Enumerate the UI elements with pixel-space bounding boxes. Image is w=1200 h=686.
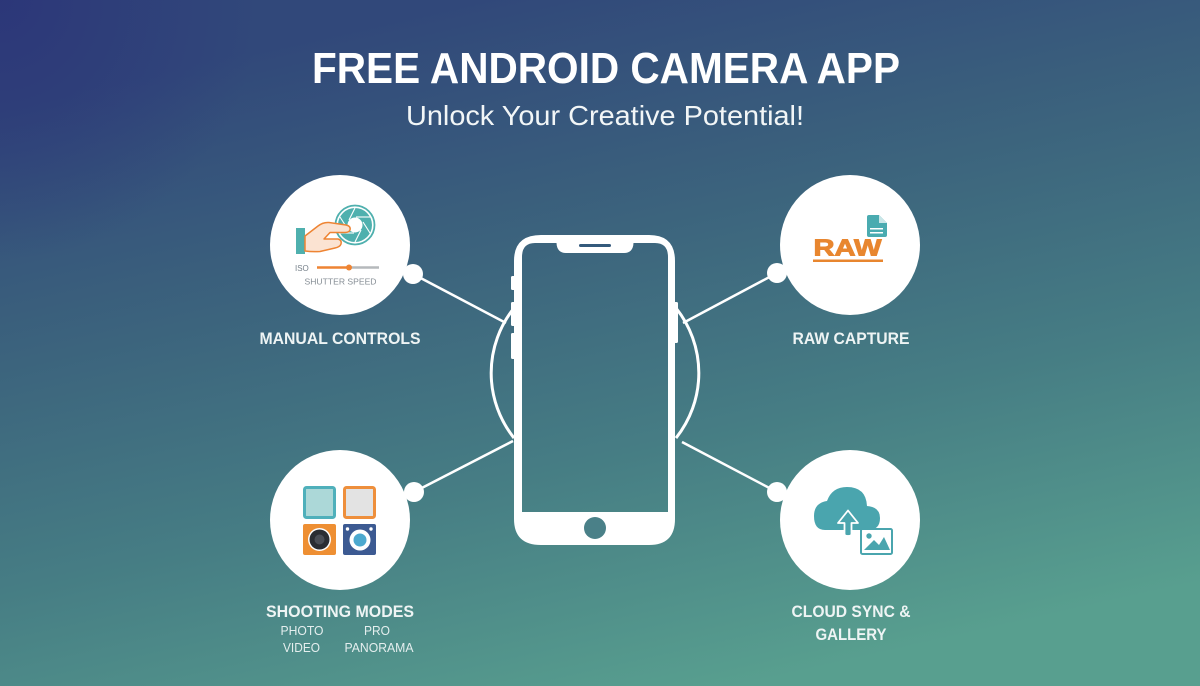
connector: raw capture: [683, 273, 777, 323]
speaker: [579, 244, 611, 247]
label: shutter speed: SHUTTER SPEED: [304, 276, 376, 286]
slider: [295, 264, 379, 273]
home button: [584, 517, 606, 539]
arc: left of phone: [491, 308, 514, 438]
mode list: PANORAMA: [344, 640, 414, 655]
panel: shooting modes: [270, 450, 424, 590]
panel: raw capture: [767, 175, 920, 315]
icon: aperture: [336, 206, 374, 244]
icon: upload arrow: [838, 510, 858, 536]
heading: shooting modes: SHOOTING MODES: [266, 602, 414, 621]
phone body: [514, 235, 675, 545]
mode list: VIDEO: [283, 640, 320, 655]
connector: manual controls: [413, 274, 506, 323]
heading: raw capture: RAW CAPTURE: [792, 329, 910, 348]
slider: ISO: [295, 264, 309, 273]
arc: right of phone: [676, 308, 699, 438]
panel: cloud sync and gallery: [767, 450, 920, 590]
heading: cloud sync and gallery: GALLERY: [816, 625, 887, 644]
title: FREE ANDROID CAMERA APP: [312, 44, 900, 93]
icon: document: [867, 215, 887, 237]
icon: raw wordmark: RAW: [814, 234, 882, 260]
mode list: PHOTO: [280, 623, 324, 638]
panel: manual controls: [270, 175, 423, 315]
mode list: [280, 623, 414, 655]
mode list: PRO: [364, 623, 390, 638]
icon: hand: [296, 222, 350, 254]
phone: [511, 235, 678, 545]
heading: manual controls: MANUAL CONTROLS: [260, 329, 420, 348]
side buttons: [511, 276, 678, 359]
subtitle: Unlock Your Creative Potential!: [406, 100, 804, 131]
connector: shooting modes: [414, 441, 513, 492]
icon: mode grid: [303, 488, 376, 555]
icon: cloud: [814, 487, 880, 530]
icon: picture: [861, 529, 892, 554]
heading: cloud sync and gallery: CLOUD SYNC &: [792, 602, 910, 621]
connector: cloud sync: [682, 442, 777, 492]
heading: cloud sync and gallery: [792, 602, 910, 644]
